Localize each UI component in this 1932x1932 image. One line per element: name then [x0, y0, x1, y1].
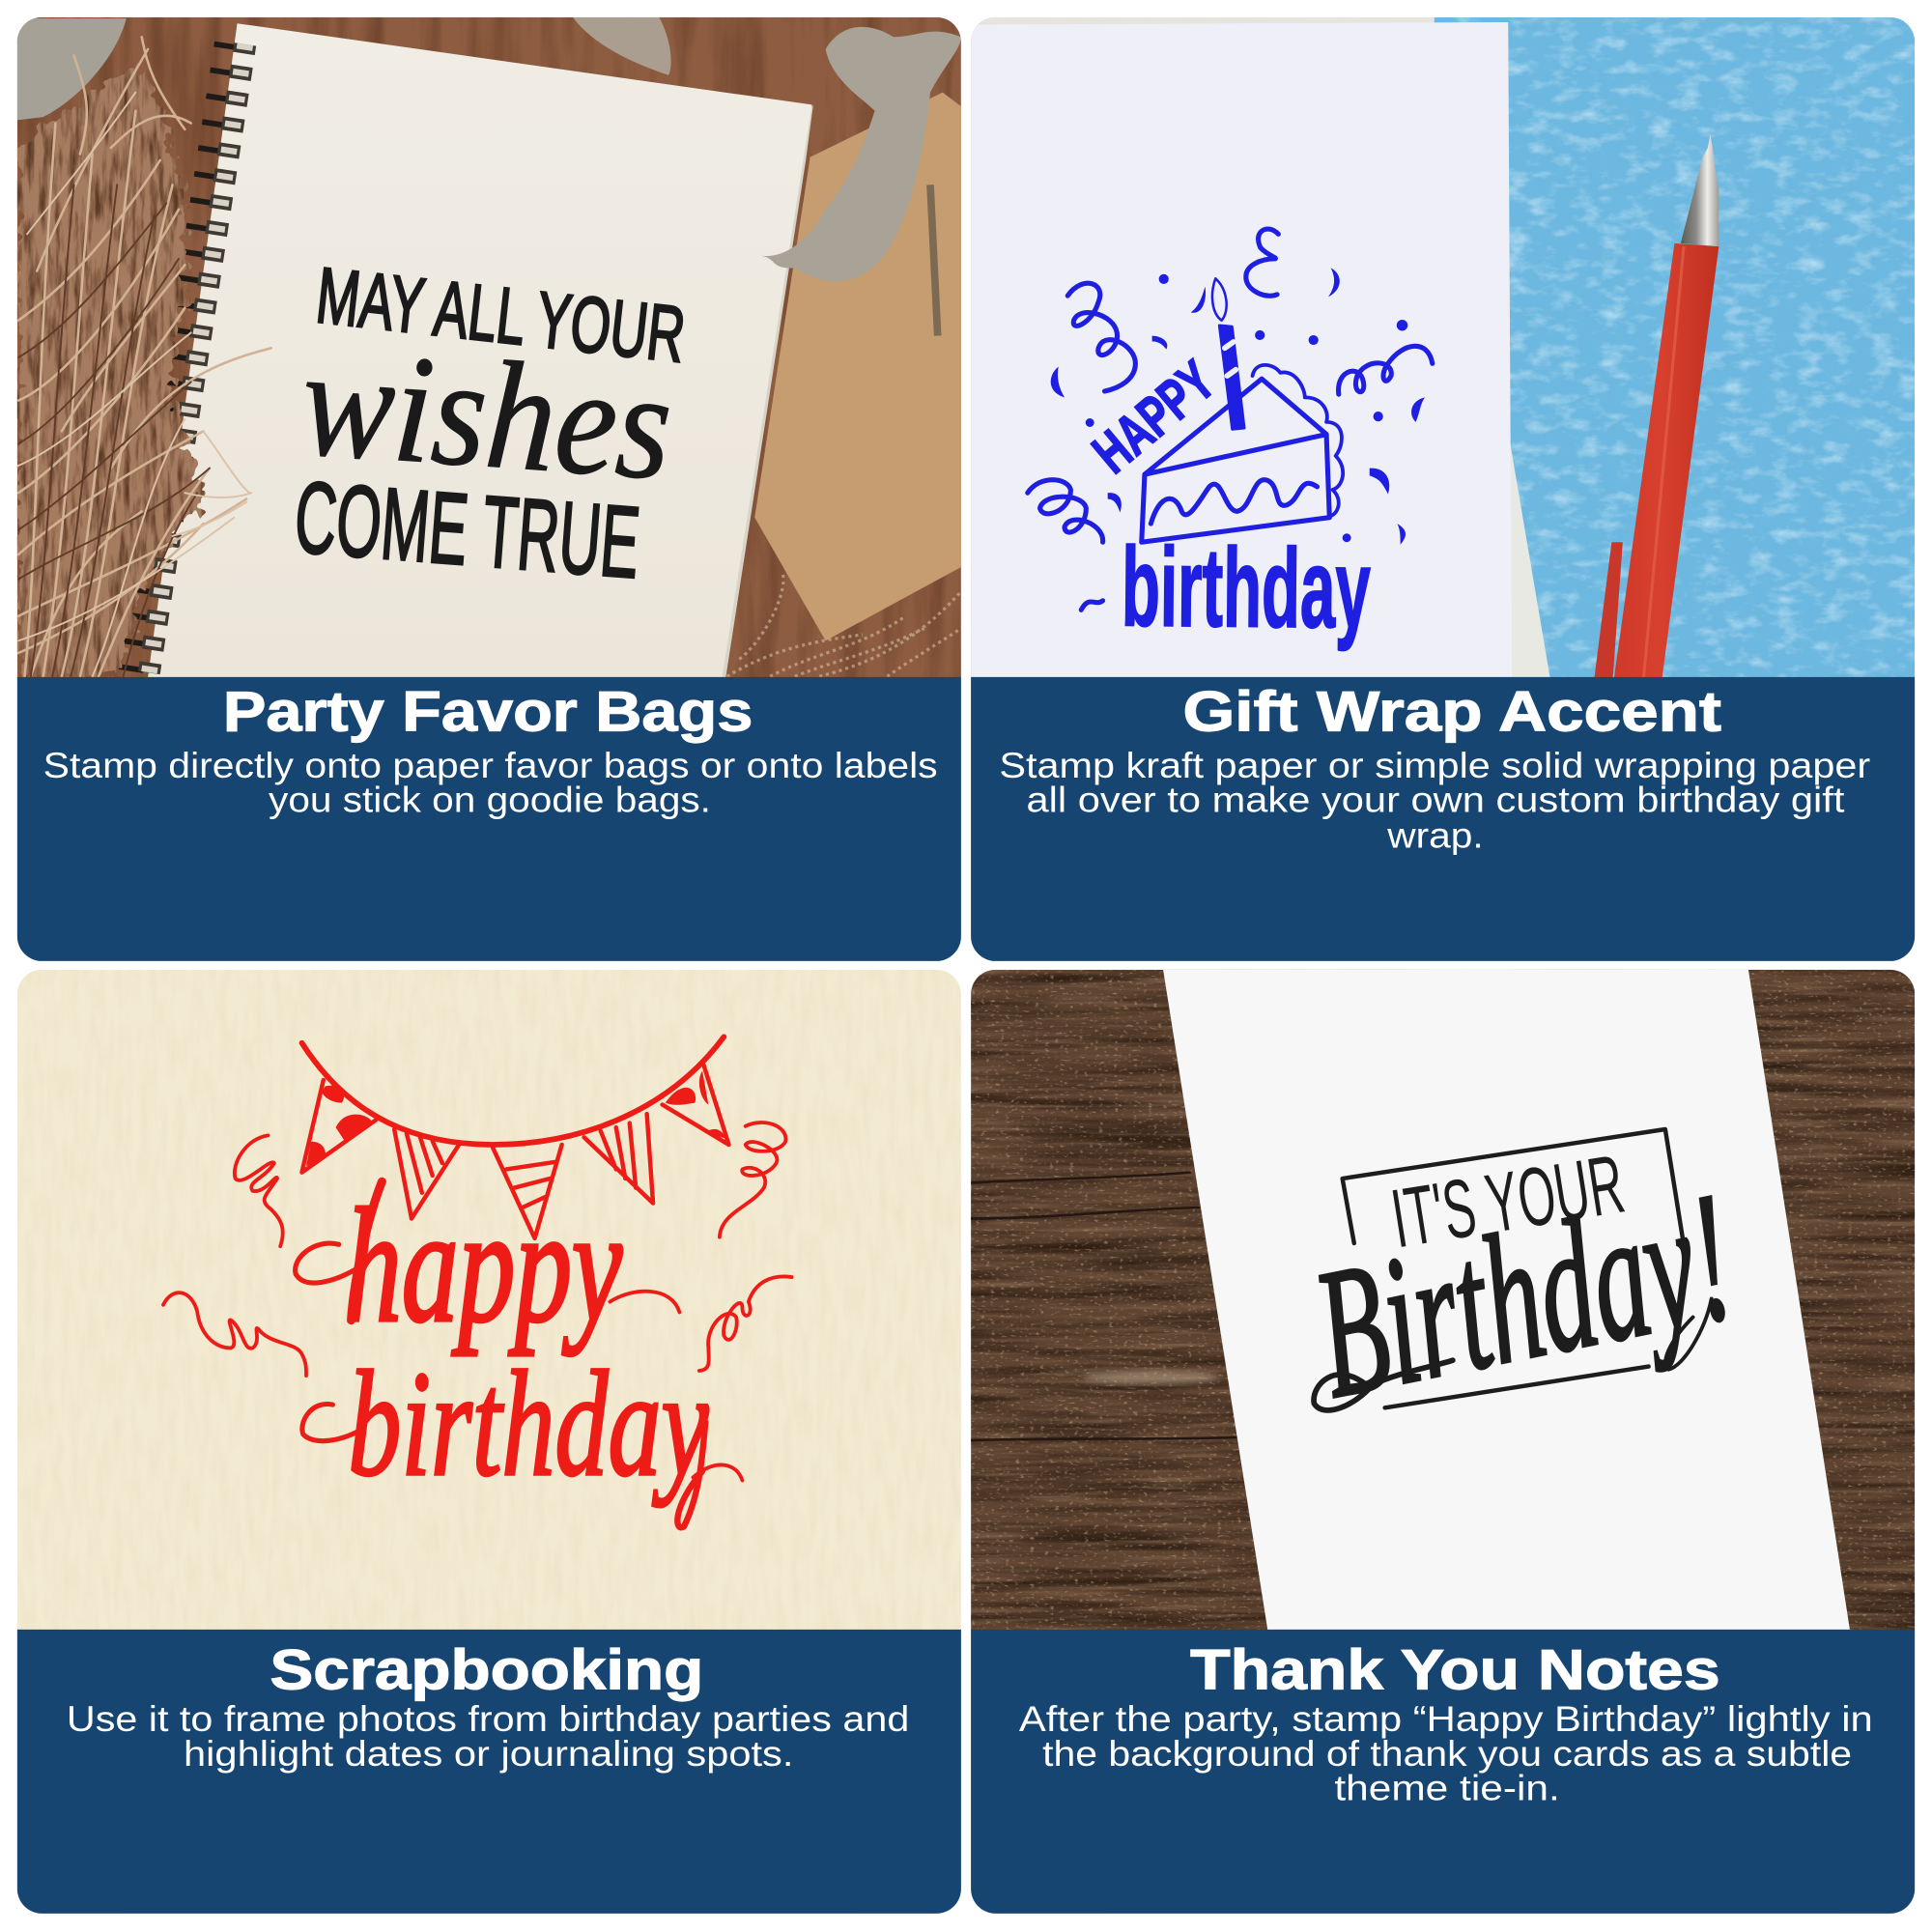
cake outline — [1142, 379, 1329, 542]
heading: Thank You Notes — [1190, 1639, 1720, 1702]
lettering: birthday: birthday — [348, 1340, 709, 1507]
body text: you stick on goodie bags. — [269, 781, 711, 820]
streamer upper left — [235, 1135, 283, 1246]
body text: After the party, stamp “Happy Birthday” lightly in — [1019, 1699, 1873, 1739]
lettering: happy: HAPPY — [1082, 350, 1227, 485]
pen silver tip — [1681, 134, 1719, 246]
streamer lower left — [1028, 480, 1103, 542]
heading: Gift Wrap Accent — [1182, 680, 1721, 743]
heading: Party Favor Bags — [223, 680, 753, 743]
body text — [1019, 1699, 1873, 1808]
blue stamp: cake and confetti — [1028, 229, 1433, 610]
lettering: May all your: MAY ALL YOUR — [312, 251, 690, 380]
wood cracks — [971, 1173, 1237, 1440]
lettering: happy: happy — [345, 1175, 623, 1356]
dried grass strokes — [13, 37, 271, 676]
pen body — [1614, 243, 1719, 678]
notebook page — [148, 23, 812, 678]
happy swash left — [296, 1243, 360, 1283]
spiral binding dark — [130, 43, 227, 671]
wood highlight — [1083, 1370, 1218, 1385]
leaf: top left — [17, 18, 127, 120]
panel: Gift Wrap Accent — [971, 17, 1915, 961]
caption panel: Party Favor Bags — [17, 677, 961, 961]
photo: card and red pen on blue — [971, 17, 1915, 678]
streamer upper left — [1067, 283, 1135, 391]
flag 2 — [394, 1129, 459, 1218]
streamer right — [1339, 346, 1433, 394]
notebook page edge — [715, 104, 813, 678]
flag dots — [306, 1070, 725, 1166]
candle — [1219, 326, 1244, 430]
streamer top — [1246, 229, 1278, 296]
body text — [67, 1699, 909, 1774]
photo: white card on dark wood — [971, 970, 1915, 1632]
body text — [999, 746, 1870, 856]
cake frosting — [1151, 480, 1318, 524]
birthday y tail — [677, 1422, 705, 1527]
caption panel: Thank You Notes — [971, 1630, 1915, 1914]
blue stamp: dots and drops — [1051, 268, 1425, 545]
happy swash right — [610, 1292, 679, 1312]
kraft envelope — [754, 93, 967, 640]
caption panel: Scrapbooking — [17, 1630, 961, 1914]
small tilde — [1081, 601, 1103, 610]
pen highlight — [1644, 246, 1684, 678]
body text — [43, 746, 938, 820]
lettering: it's your: IT'S YOUR — [1385, 1138, 1631, 1265]
body text: all over to make your own custom birthday gift — [1026, 781, 1844, 820]
photo: cream paper with red lettering — [17, 970, 961, 1631]
white card — [971, 22, 1512, 678]
streamer lower right — [699, 1276, 792, 1371]
heading: Scrapbooking — [270, 1639, 703, 1702]
y tail — [1665, 1298, 1712, 1370]
envelope wedge — [1511, 444, 1549, 677]
cake crust — [1253, 365, 1343, 516]
panel: Party Favor Bags — [13, 17, 967, 961]
bunting string — [301, 1037, 724, 1145]
panel: Scrapbooking — [17, 970, 961, 1914]
photo: spiral notebook on wood — [13, 17, 967, 678]
body text: Stamp kraft paper or simple solid wrapping paper — [999, 746, 1870, 785]
happy ascender — [352, 1181, 382, 1321]
body text: Use it to frame photos from birthday parties and — [67, 1699, 909, 1739]
lettering: come true: COME TRUE — [291, 461, 643, 600]
body text: Stamp directly onto paper favor bags or onto labels — [43, 746, 938, 785]
birthday swash — [1314, 1360, 1453, 1410]
white card — [1163, 970, 1850, 1632]
leaf: stem — [930, 185, 938, 336]
frame lines — [1314, 1129, 1712, 1410]
leaf: top middle — [573, 17, 671, 75]
envelope strip — [971, 17, 1435, 25]
dried stems at lower right — [727, 573, 961, 676]
lettering: wishes: wishes — [297, 317, 677, 512]
streamer lower left — [163, 1293, 306, 1376]
body text: theme tie-in. — [1334, 1769, 1560, 1808]
streamer upper right — [720, 1122, 785, 1237]
spiral binding hole centres — [149, 44, 245, 672]
flame — [1212, 278, 1227, 321]
lettering: birthday: birthday — [1121, 524, 1371, 652]
bunting and streamers — [163, 1037, 792, 1527]
flag 1 — [301, 1080, 376, 1173]
body text: the background of thank you cards as a subtle — [1042, 1734, 1852, 1774]
candle stripes — [1225, 342, 1236, 376]
body text: wrap. — [1386, 816, 1484, 856]
flag 3 — [493, 1145, 562, 1238]
flag 4 — [584, 1114, 653, 1204]
leaf: eucalyptus right — [761, 27, 961, 281]
pen clip — [1595, 542, 1623, 678]
body text: highlight dates or journaling spots. — [184, 1734, 793, 1774]
dried grass mass — [17, 68, 203, 678]
caption panel: Gift Wrap Accent — [971, 677, 1915, 961]
birthday swash left — [302, 1405, 363, 1441]
flag 5 — [663, 1065, 728, 1145]
panel: Thank You Notes — [971, 970, 1915, 1914]
spiral binding holes — [149, 44, 245, 672]
birthday swash right — [693, 1464, 742, 1481]
